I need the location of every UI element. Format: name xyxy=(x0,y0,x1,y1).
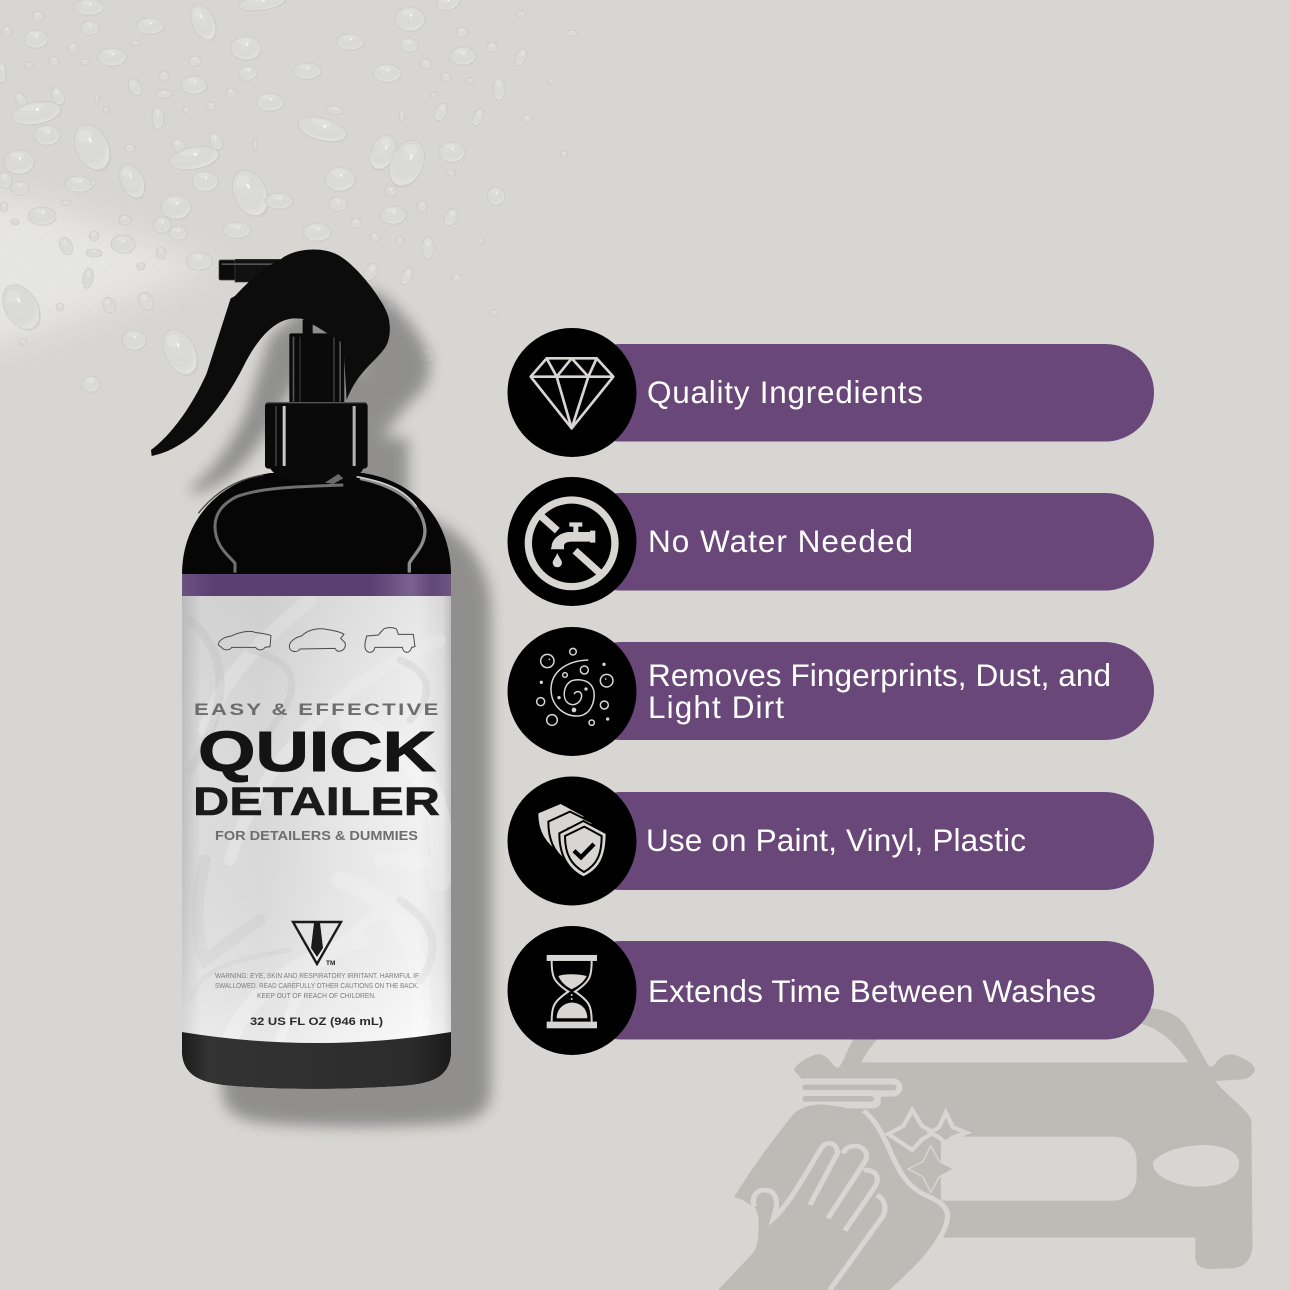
car silhouette xyxy=(794,1007,1255,1269)
subtitle: FOR DETAILERS & DUMMIES xyxy=(215,829,418,843)
feature: no water needed xyxy=(508,477,1154,606)
circle badge xyxy=(508,328,636,457)
pill xyxy=(572,493,1154,590)
sprayer trigger xyxy=(151,250,390,456)
circle badge xyxy=(508,477,636,606)
base xyxy=(182,1020,451,1089)
bottle xyxy=(151,250,460,1089)
vehicle outlines xyxy=(218,628,415,652)
pump tube xyxy=(289,320,344,403)
windscreen xyxy=(861,1020,1188,1062)
bottle body xyxy=(182,473,451,1089)
bottle cast shadow xyxy=(191,288,491,1127)
icon: dust swirl xyxy=(537,648,613,725)
label: Removes Fingerprints, Dust, and xyxy=(648,657,1111,693)
icon: layered shields xyxy=(538,804,607,877)
feature: extends time xyxy=(508,926,1154,1055)
brand logo xyxy=(293,922,341,967)
hand xyxy=(718,1143,886,1290)
cloth xyxy=(734,1104,947,1290)
feature: use on surfaces xyxy=(508,776,1154,906)
cloth edge xyxy=(864,1111,948,1290)
tagline: EASY & EFFECTIVE xyxy=(194,700,438,719)
warning text: KEEP OUT OF REACH OF CHILDREN. xyxy=(257,991,376,1000)
volume: 32 US FL OZ (946 mL) xyxy=(250,1016,383,1028)
pill xyxy=(572,941,1154,1040)
bottle cap xyxy=(265,402,368,484)
pill xyxy=(572,792,1154,890)
warning text xyxy=(215,971,419,1000)
icon: hourglass xyxy=(547,955,597,1028)
water droplets xyxy=(0,0,577,393)
label: Use on Paint, Vinyl, Plastic xyxy=(646,822,1026,858)
product name: QUICK xyxy=(198,720,436,784)
headlight xyxy=(1153,1145,1239,1187)
warning text: SWALLOWED. READ CAREFULLY OTHER CAUTIONS ON THE BACK. xyxy=(215,981,419,990)
icon: diamond xyxy=(531,358,613,428)
product name line two: DETAILER xyxy=(193,780,440,824)
shoulder highlights xyxy=(198,475,425,573)
feature: quality ingredients xyxy=(508,328,1154,457)
spray mist xyxy=(0,190,215,350)
pill xyxy=(572,642,1154,740)
label pattern xyxy=(198,626,451,1042)
label xyxy=(182,596,460,1043)
label: Quality Ingredients xyxy=(647,374,923,410)
finger outlines xyxy=(753,1143,885,1290)
label: No Water Needed xyxy=(648,523,913,559)
sprayer nozzle xyxy=(219,259,285,282)
warning text: WARNING: EYE, SKIN AND RESPIRATORY IRRITANT. HARMFUL IF xyxy=(215,971,419,980)
label: Extends Time Between Washes xyxy=(648,973,1096,1009)
cloth stripes xyxy=(796,1078,902,1108)
label: Light Dirt xyxy=(648,689,784,725)
brand logo: TM xyxy=(326,960,335,967)
car and hand watermark xyxy=(718,1007,1255,1290)
sparkles xyxy=(888,1110,966,1192)
icon: no water tap xyxy=(528,500,615,587)
circle badge xyxy=(508,627,636,756)
grille xyxy=(941,1137,1137,1201)
purple band xyxy=(182,574,451,596)
circle badge xyxy=(508,926,636,1055)
feature: removes fingerprints xyxy=(508,627,1154,756)
pill xyxy=(572,344,1154,442)
circle badge xyxy=(508,776,636,906)
